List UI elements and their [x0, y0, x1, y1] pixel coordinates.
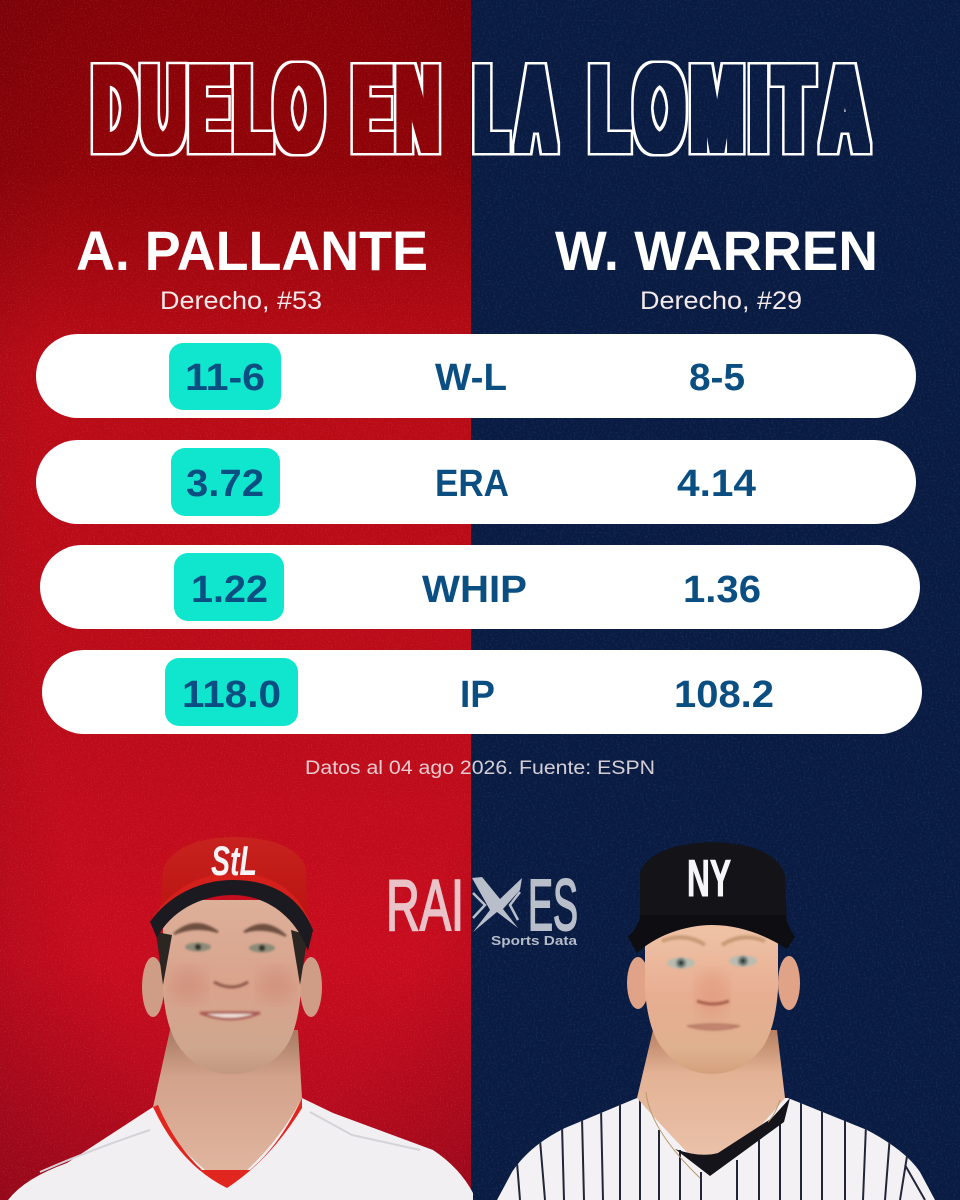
player header: W. Warren: W. WARREN: [555, 219, 878, 282]
stat row: ERA: ERA: [435, 463, 509, 505]
hair: [156, 930, 308, 985]
title: [93, 43, 874, 175]
necklace: [646, 1092, 780, 1178]
player header: A. Pallante: [76, 219, 428, 315]
brand logo: Sports Data: [491, 933, 578, 948]
stat row: WHIP: WHIP: [422, 569, 527, 611]
facial features: [174, 924, 286, 1019]
background: navy half: [471, 0, 960, 1200]
face: [163, 900, 301, 1074]
cap logo: NY: [687, 850, 731, 908]
portrait: A. Pallante: [8, 837, 473, 1200]
stat row: W-L: [36, 334, 916, 418]
cap: [150, 837, 313, 951]
icon: logo X mark: [472, 877, 522, 932]
facial features: [662, 937, 765, 1030]
player header: W. Warren: [555, 219, 878, 315]
ears: [627, 956, 800, 1010]
collar: [153, 1098, 302, 1188]
player header: A. Pallante: A. PALLANTE: [76, 219, 428, 282]
ears: [142, 957, 322, 1017]
face: [645, 915, 778, 1074]
title: EN: [353, 43, 443, 174]
stat row: WHIP: [40, 545, 920, 629]
stat row: WHIP: 1.36: [683, 569, 761, 611]
cap logo: StL: [211, 837, 257, 884]
stat row: W-L: W-L: [435, 357, 507, 399]
stat row: W-L: 11-6: [185, 357, 265, 399]
stat row: ERA: 4.14: [677, 463, 756, 505]
jersey: [497, 1095, 935, 1200]
cap: [628, 842, 795, 953]
stat row: W-L: 8-5: [689, 357, 745, 399]
source note: Datos al 04 ago 2026. Fuente: ESPN: [305, 758, 655, 779]
stat row: IP: 118.0: [182, 674, 281, 716]
collar: [675, 1098, 790, 1176]
brand logo: ES: [528, 866, 578, 946]
brand logo: [386, 866, 578, 948]
brand logo: RAI: [386, 866, 464, 946]
title: LA: [475, 45, 565, 175]
portrait: W. Warren: [497, 842, 935, 1200]
jersey: [8, 1095, 473, 1200]
neck: [637, 1030, 785, 1176]
title: LOMITA: [590, 43, 874, 174]
player header: W. Warren: Derecho, #29: [640, 287, 802, 315]
title: DUELO: [93, 44, 327, 174]
player header: A. Pallante: Derecho, #53: [160, 287, 322, 315]
neck: [153, 1030, 302, 1170]
stat row: IP: 108.2: [674, 674, 774, 716]
background: red half: [0, 0, 471, 1200]
stat row: ERA: 3.72: [186, 463, 264, 505]
stat row: IP: IP: [460, 674, 495, 716]
stat row: ERA: [36, 440, 916, 524]
stat row: IP: [42, 650, 922, 734]
stat row: WHIP: 1.22: [191, 569, 268, 611]
